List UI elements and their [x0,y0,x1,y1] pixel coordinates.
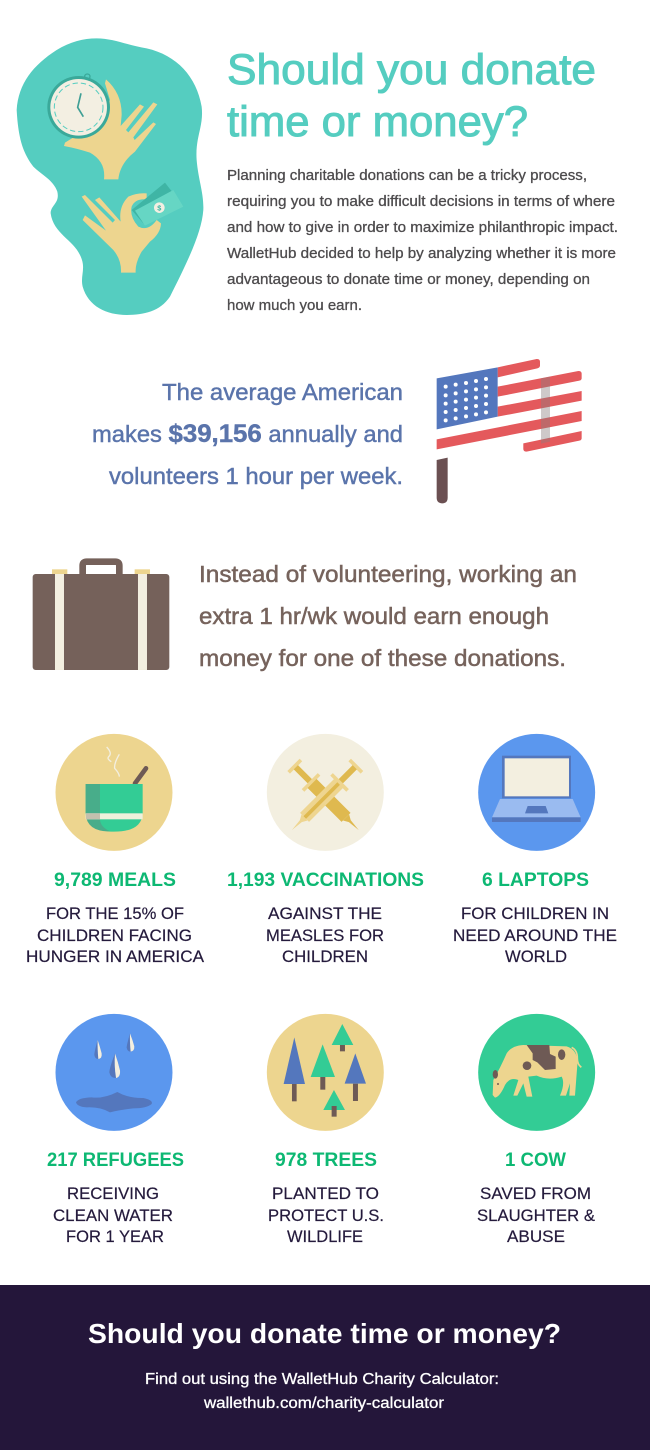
intro paragraph: Planning charitable donations can be a tricky process, [227,168,587,184]
intro paragraph: how much you earn. [227,298,362,314]
stat: cow: ABUSE [507,1227,565,1246]
footer panel [0,1285,650,1450]
stat: vaccinations: CHILDREN [282,947,368,966]
volunteering text: money for one of these donations. [199,645,566,671]
volunteering text [199,561,577,671]
title: Should you donate [227,46,596,94]
stat: trees: WILDLIFE [287,1227,363,1246]
flag shadow [541,377,550,444]
stat: vaccinations: AGAINST THE [268,904,382,923]
icon: laptop [478,734,595,851]
stat: meals: 9,789 MEALS [54,870,176,891]
intro paragraph: advantageous to donate time or money, depending on [227,272,590,288]
average American text [92,379,403,489]
stat: refugees: RECEIVING [67,1184,159,1203]
average American text: makes $39,156 annually and [92,420,403,448]
stat: laptops [453,870,617,966]
icon: water drops [55,1014,172,1131]
money: $ [157,203,161,212]
stat: trees: PROTECT U.S. [268,1206,384,1225]
teal blob background [17,38,203,315]
stat: cow: SLAUGHTER & [477,1206,596,1225]
footer call to action [145,1371,499,1412]
footer call to action: wallethub.com/charity-calculator [203,1395,444,1412]
stat: cow: SAVED FROM [480,1184,591,1203]
flag stripes [437,359,582,452]
stat: refugees: FOR 1 YEAR [66,1227,164,1246]
stat: meals: FOR THE 15% OF [46,904,184,923]
intro paragraph [227,168,618,314]
stat: trees: PLANTED TO [272,1184,379,1203]
title [227,46,596,146]
icon: soup bowl [55,734,172,851]
footer call to action: Find out using the WalletHub Charity Calculator: [145,1371,499,1388]
stat: refugees [47,1150,184,1246]
icon: crossed syringes [267,734,384,851]
intro paragraph: and how to give in order to maximize philanthropic impact. [227,220,618,236]
intro paragraph: requiring you to make difficult decisions in terms of where [227,194,615,210]
stat: vaccinations: MEASLES FOR [266,926,384,945]
lower hand [82,193,161,273]
stat: laptops: 6 LAPTOPS [482,870,589,891]
money [132,183,183,226]
icon: trees [267,1014,384,1131]
stat: laptops: NEED AROUND THE [453,926,617,945]
stat: laptops: FOR CHILDREN IN [461,904,609,923]
stat: meals: HUNGER IN AMERICA [26,947,205,966]
stat: vaccinations: 1,193 VACCINATIONS [227,870,424,891]
hero illustration: hands with clock and money [17,38,203,315]
icon: cow [478,1014,595,1131]
stat: refugees: CLEAN WATER [53,1206,173,1225]
stat: trees [268,1150,384,1246]
blue canton with stars [437,367,498,429]
stat: meals: CHILDREN FACING [37,926,192,945]
average American text: The average American [162,379,403,405]
stat: cow: 1 COW [505,1150,566,1171]
stat: meals [26,870,205,966]
clock [47,74,110,139]
title: time or money? [227,98,528,146]
volunteering text: Instead of volunteering, working an [199,561,577,587]
stat: refugees: 217 REFUGEES [47,1150,184,1171]
icon: suitcase [33,562,169,670]
stat: laptops: WORLD [505,947,567,966]
stat: trees: 978 TREES [275,1150,377,1171]
average American text: volunteers 1 hour per week. [109,463,403,489]
upper hand [64,79,157,179]
stat: vaccinations [227,870,424,966]
intro paragraph: WalletHub decided to help by analyzing whether it is more [227,246,616,262]
flag pole [437,458,448,503]
footer heading: Should you donate time or money? [88,1318,561,1349]
volunteering text: extra 1 hr/wk would earn enough [199,603,549,629]
icon: American flag [437,359,582,503]
stat: cow [477,1150,596,1246]
